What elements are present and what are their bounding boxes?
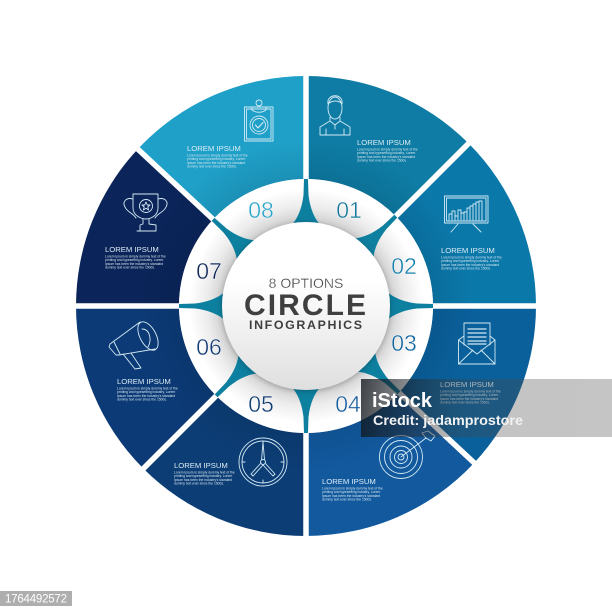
number labels: 01 [336, 197, 362, 223]
text block 02: Lorem Ipsum is simply dummy text of the [441, 256, 502, 260]
text block 04: LOREM IPSUM [322, 477, 376, 486]
number labels: 05 [248, 391, 274, 417]
text block 02: Ipsum has been the industry's standard [441, 263, 499, 267]
text block 02: printing and typesetting industry. Lorem [441, 259, 500, 263]
number labels: 06 [196, 334, 222, 360]
panel: segment 06 [76, 306, 216, 469]
icon: presentation chart [444, 196, 488, 232]
watermark band: Credit: jadamprostore [373, 412, 523, 428]
text block 08: printing and typesetting industry. Lorem [187, 157, 246, 161]
text block 07: Lorem Ipsum is simply dummy text of the [105, 254, 166, 258]
text block 07 [105, 245, 166, 270]
text block 04 [322, 477, 383, 502]
number labels: 04 [335, 391, 361, 417]
text block 06: LOREM IPSUM [117, 377, 171, 386]
text block 05: Ipsum has been the industry's standard [174, 478, 232, 482]
text block 01: Lorem Ipsum is simply dummy text of the [357, 148, 418, 152]
text block 03: dummy text ever since the 1500s. [440, 401, 490, 405]
center circle title: 8 OPTIONS [269, 275, 343, 291]
text block 08 [187, 144, 248, 169]
center circle title: INFOGRAPHICS [249, 318, 362, 332]
panel: segment 03 [399, 306, 536, 463]
icon: envelope [458, 323, 495, 364]
text block 06: Ipsum has been the industry's standard [117, 394, 175, 398]
number labels: 03 [391, 330, 417, 356]
text block 05: Lorem Ipsum is simply dummy text of the [174, 470, 235, 474]
number labels [196, 197, 417, 417]
panel: segment 01 [306, 76, 469, 216]
text block 01: printing and typesetting industry. Lorem [357, 151, 416, 155]
text block 05: printing and typesetting industry. Lorem [174, 474, 233, 478]
text block 03: Lorem Ipsum is simply dummy text of the [440, 390, 501, 394]
number labels: 08 [248, 197, 274, 223]
text block 08: LOREM IPSUM [187, 144, 241, 153]
stock image id tag [0, 591, 72, 606]
inner ring of number petals [179, 179, 433, 433]
text block 08: Ipsum has been the industry's standard [187, 161, 245, 165]
number labels: 07 [196, 258, 222, 284]
text block 07: Ipsum has been the industry's standard [105, 262, 163, 266]
text block 07: printing and typesetting industry. Lorem [105, 258, 164, 262]
text block 02: dummy text ever since the 1500s. [441, 267, 491, 271]
text block 01: dummy text ever since the 1500s. [357, 159, 407, 163]
text block 03: LOREM IPSUM [440, 380, 494, 389]
text block 03 [440, 380, 501, 405]
text block 06 [117, 377, 178, 402]
text block 01: LOREM IPSUM [357, 138, 411, 147]
center circle title: CIRCLE [244, 289, 366, 322]
text block 05 [174, 461, 235, 486]
text block 06: printing and typesetting industry. Lorem [117, 390, 176, 394]
text block 07: LOREM IPSUM [105, 245, 159, 254]
icon: megaphone [109, 319, 162, 369]
text block 02: LOREM IPSUM [441, 246, 495, 255]
text block 05: dummy text ever since the 1500s. [174, 482, 224, 486]
panel: segment 02 [396, 143, 536, 306]
text block 08: dummy text ever since the 1500s. [187, 165, 237, 169]
icon: target with arrow [380, 431, 435, 478]
teal connectors between petals [179, 179, 433, 433]
text block 08: Lorem Ipsum is simply dummy text of the [187, 154, 248, 158]
panel: segment 05 [143, 396, 306, 536]
text block 01 [357, 138, 418, 163]
panel: segment 07 [76, 149, 213, 306]
text block 04: Ipsum has been the industry's standard [322, 494, 380, 498]
text block 06: dummy text ever since the 1500s. [117, 398, 167, 402]
text block 02 [441, 246, 502, 271]
text block 03: Ipsum has been the industry's standard [440, 397, 498, 401]
watermark band [361, 379, 612, 437]
text block 01: Ipsum has been the industry's standard [357, 155, 415, 159]
watermark band: iStock [372, 390, 433, 412]
number labels: 02 [391, 253, 417, 279]
text block 07: dummy text ever since the 1500s. [105, 266, 155, 270]
icon: person [320, 96, 350, 135]
panel: segment 04 [306, 393, 474, 536]
center circle title [222, 222, 390, 390]
text block 04: Lorem Ipsum is simply dummy text of the [322, 486, 383, 490]
text block 04: printing and typesetting industry. Lorem [322, 490, 381, 494]
text block 06: Lorem Ipsum is simply dummy text of the [117, 386, 178, 390]
icon: trophy [124, 194, 167, 231]
text block 03: printing and typesetting industry. Lorem [440, 393, 499, 397]
text block 04: dummy text ever since the 1500s. [322, 498, 372, 502]
text block 05: LOREM IPSUM [174, 461, 228, 470]
icon: clipboard with check [244, 100, 273, 141]
stock image id tag: 1764492572 [5, 594, 67, 606]
panel: segment 08 [138, 76, 306, 219]
icon: clock dial [239, 438, 287, 486]
